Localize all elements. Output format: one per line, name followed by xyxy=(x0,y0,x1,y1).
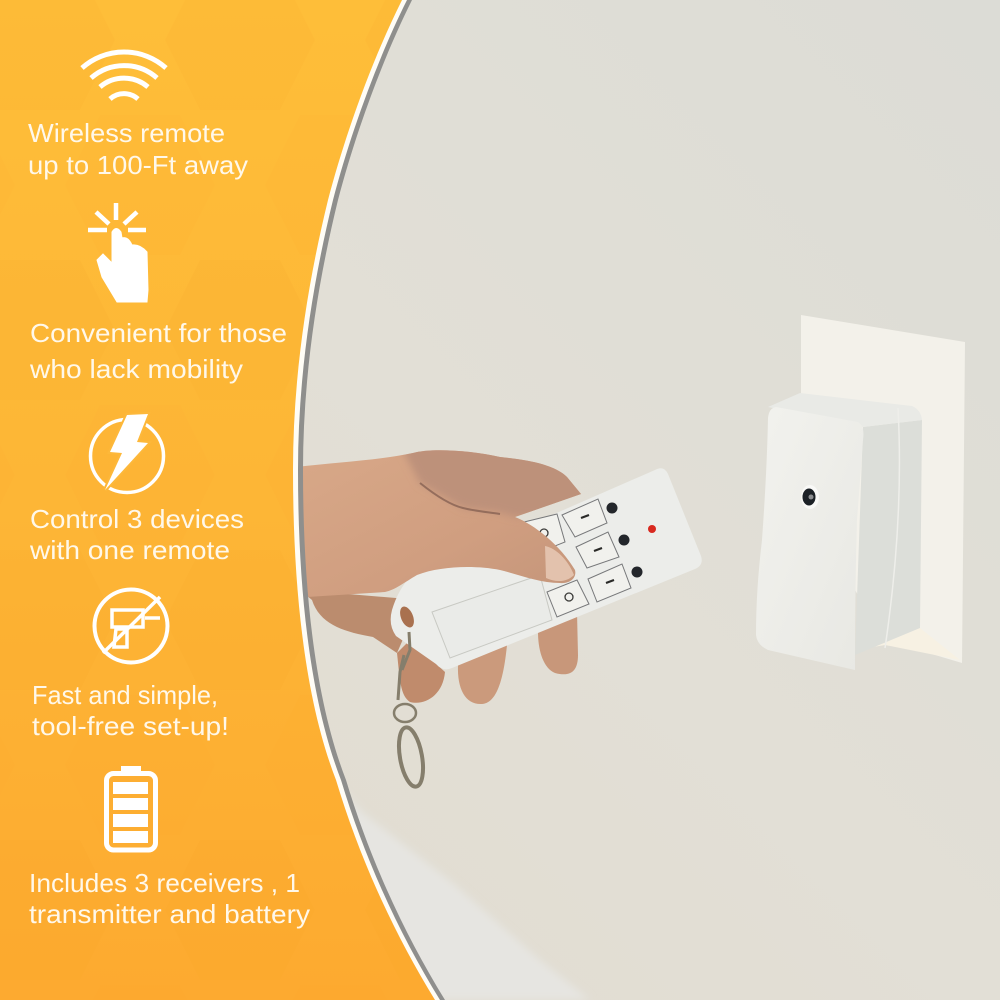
palm under remote xyxy=(300,590,420,653)
icon: tapping hand xyxy=(88,203,148,302)
text: includes: Includes 3 receivers , 1 xyxy=(29,868,300,898)
text: convenient: Convenient for those xyxy=(30,318,287,348)
hand and thumb xyxy=(303,450,581,597)
text: fast and simple xyxy=(32,680,229,741)
text: convenient: who lack mobility xyxy=(29,354,243,384)
text: wireless remote: Wireless remote xyxy=(28,118,225,148)
thumbnail xyxy=(545,546,574,581)
text: includes: transmitter and battery xyxy=(29,899,310,929)
button marks xyxy=(540,515,614,601)
icon: lightning bolt in circle xyxy=(90,414,164,492)
text: convenient xyxy=(29,318,287,384)
receiver sensor lens xyxy=(801,485,819,509)
text: control devices xyxy=(29,504,244,565)
baseboard moulding xyxy=(335,785,590,1000)
text: control devices: Control 3 devices xyxy=(30,504,244,534)
text: wireless remote: up to 100-Ft away xyxy=(28,150,248,180)
key ring hole xyxy=(397,605,417,629)
icon: wifi xyxy=(82,52,166,99)
icon: no tools drill xyxy=(94,590,168,662)
sidebar panel xyxy=(0,0,450,1000)
knuckles xyxy=(404,450,581,518)
red LED xyxy=(648,525,656,533)
text: includes xyxy=(29,868,310,929)
lower fingers xyxy=(397,612,578,704)
key chain xyxy=(394,632,427,788)
divider stripe: gray xyxy=(10,0,445,1000)
text: fast and simple: tool-free set-up! xyxy=(32,711,229,741)
text: wireless remote xyxy=(28,118,248,180)
text: fast and simple: Fast and simple, xyxy=(32,680,218,710)
icon: battery xyxy=(106,766,156,850)
text: control devices: with one remote xyxy=(29,535,230,565)
remote buttons xyxy=(520,499,631,617)
wall plate xyxy=(801,315,965,663)
remote control xyxy=(391,468,702,669)
channel number badges xyxy=(606,502,642,578)
plug-in receiver xyxy=(756,393,922,670)
